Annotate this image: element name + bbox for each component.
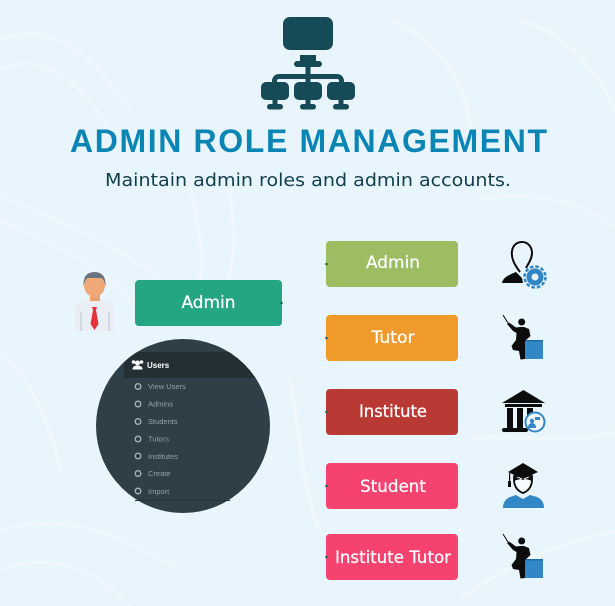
icon: student with graduation cap bbox=[503, 463, 544, 508]
box: Student role: Student bbox=[360, 477, 427, 496]
menu list: View Users bbox=[148, 382, 186, 391]
icon: institute building with badge bbox=[502, 390, 545, 432]
icon: tutor with pointer bbox=[503, 315, 543, 360]
box: Institute role bbox=[326, 389, 458, 435]
menu list bbox=[148, 382, 186, 496]
icon: institute tutor with pointer bbox=[503, 534, 543, 578]
icon: users bbox=[132, 360, 143, 370]
menu list: Students bbox=[148, 417, 178, 426]
menu list: Admins bbox=[148, 400, 173, 408]
box: Institute Tutor role: Institute Tutor bbox=[335, 548, 451, 567]
connector dot: main Admin bbox=[280, 302, 283, 304]
menu heading: Users bbox=[147, 361, 170, 370]
panel: Users menu screenshot circle bbox=[96, 339, 270, 513]
box: Institute Tutor role bbox=[326, 534, 458, 580]
icon: admin person with red tie bbox=[75, 272, 114, 331]
box: Student role bbox=[326, 463, 458, 509]
box: Institute role: Institute bbox=[359, 402, 427, 421]
icon: admin head with gear bbox=[502, 242, 546, 288]
box: Admin role bbox=[326, 241, 458, 287]
box: Admin (main): Admin bbox=[182, 293, 236, 312]
box: Tutor role: Tutor bbox=[370, 328, 415, 347]
menu list: Tutors bbox=[148, 434, 169, 444]
menu list: Import bbox=[148, 487, 170, 496]
box: Tutor role bbox=[326, 315, 458, 361]
box: Admin role: Admin bbox=[366, 253, 420, 272]
menu bullets bbox=[135, 384, 141, 494]
box: Admin (main) bbox=[135, 280, 282, 326]
icon: hierarchy network bbox=[261, 17, 355, 110]
title: ADMIN ROLE MANAGEMENT bbox=[70, 123, 547, 159]
menu list: Institutes bbox=[148, 452, 178, 461]
subtitle: Maintain admin roles and admin accounts. bbox=[105, 171, 511, 191]
connector dots bbox=[325, 263, 328, 558]
menu list: Create bbox=[148, 469, 171, 478]
